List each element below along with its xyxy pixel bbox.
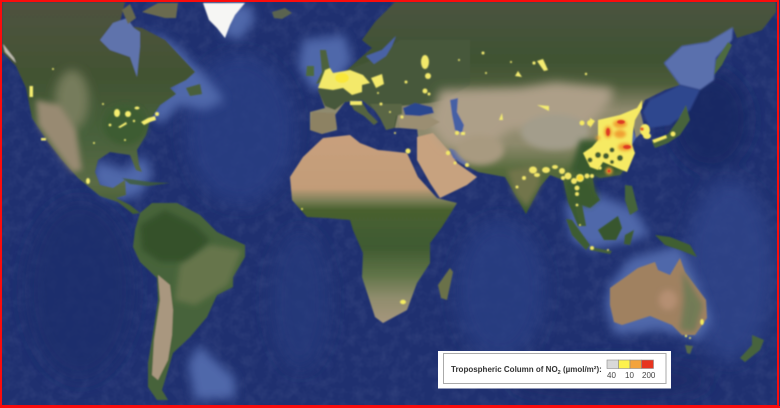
Madagascar (438, 268, 453, 300)
cutouts (588, 148, 623, 164)
Sea of Okhotsk (664, 27, 733, 90)
Iberia (310, 112, 337, 134)
Java (590, 247, 612, 254)
Borneo (598, 216, 622, 240)
legend labels: 10 (625, 371, 634, 380)
legend swatches (607, 360, 654, 368)
Tibet (521, 114, 589, 150)
Turkey (398, 114, 440, 130)
Australia (610, 258, 707, 335)
Middle East (394, 131, 469, 167)
Balkans (370, 104, 402, 130)
Korea and Japan (580, 118, 676, 143)
Arabia (417, 133, 477, 198)
NO2 hotspots (318, 52, 642, 172)
legend labels (607, 371, 656, 380)
East Asia yellow (583, 100, 642, 172)
South America (133, 203, 245, 400)
Sea of Japan (643, 85, 700, 128)
UK and Ireland (316, 50, 331, 84)
legend (438, 351, 671, 388)
Black Sea (403, 103, 434, 116)
Greenland (203, 3, 245, 38)
South and Southeast Asia (516, 165, 609, 251)
shallow seas (92, 5, 712, 400)
Africa (290, 135, 457, 323)
Baltic (366, 36, 396, 64)
red core (606, 120, 631, 172)
legend title: (µmol/m²): (561, 365, 602, 374)
India (507, 165, 540, 208)
New Guinea (655, 235, 697, 257)
Sulawesi (624, 230, 634, 245)
legend labels: 200 (642, 371, 656, 380)
Caspian Sea (450, 98, 464, 133)
Eurasia (310, 2, 776, 226)
legend labels: 40 (607, 371, 616, 380)
American southwest (36, 100, 82, 172)
New Zealand (740, 335, 764, 362)
Central Asia desert (430, 82, 612, 155)
Iceland (272, 8, 292, 19)
Russia and Central Asia (458, 52, 587, 135)
Philippines (625, 185, 638, 215)
Malay peninsula (575, 205, 586, 226)
Sakhalin (714, 42, 732, 75)
North America (30, 68, 159, 184)
Sumatra (566, 219, 590, 250)
legend title: Tropospheric Column of NO (451, 365, 558, 374)
China east forest (570, 140, 625, 178)
European plain (318, 40, 470, 128)
Iran (456, 135, 504, 165)
Persian Gulf (449, 148, 470, 165)
orange core (596, 120, 632, 174)
Great Plains (55, 70, 89, 130)
legend title: 2 (558, 370, 561, 376)
Arctic islands (142, 3, 178, 18)
Cuba (122, 178, 170, 186)
Italy (350, 102, 378, 125)
Japan (652, 105, 690, 148)
Yellow Sea (630, 125, 636, 148)
North America (2, 2, 202, 214)
Hudson Bay (100, 18, 140, 77)
Europe cluster (318, 55, 431, 119)
Indochina (565, 178, 598, 207)
Tasmania (685, 345, 693, 354)
Africa and Australia (301, 208, 704, 339)
